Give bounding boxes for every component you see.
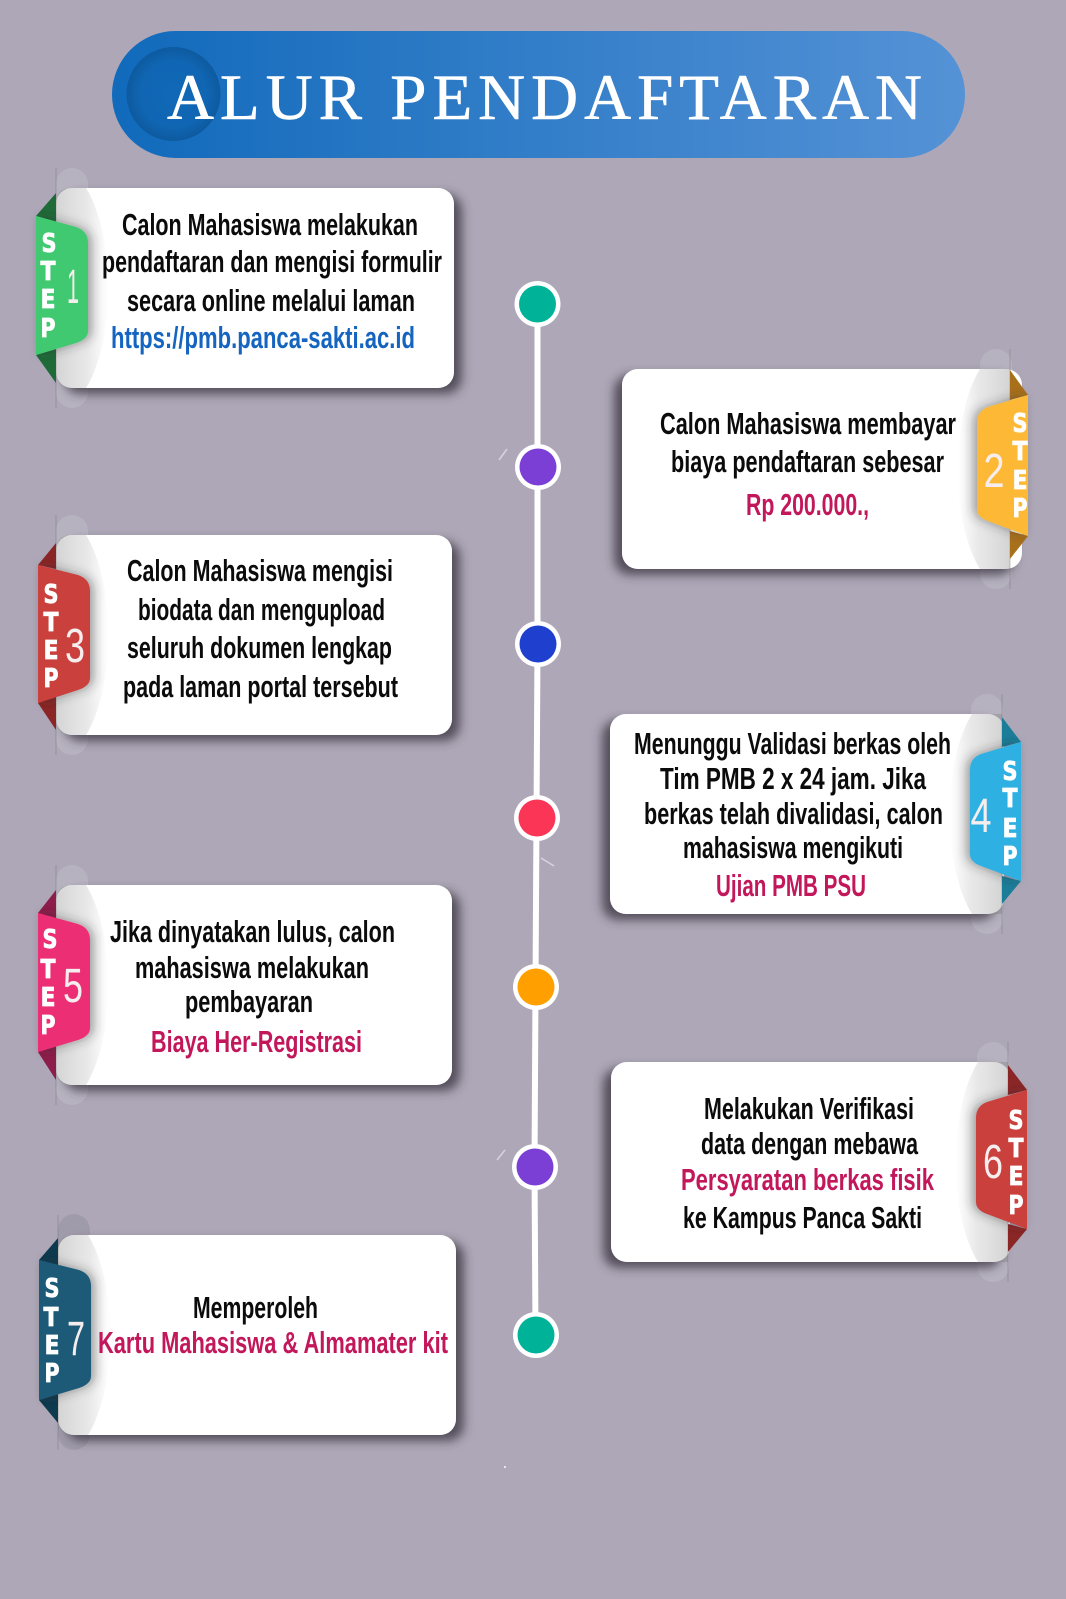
text: step 1: secara online melalui laman (127, 283, 415, 318)
ribbon label: step 7: S (44, 1274, 60, 1304)
ribbon label: step 2: P (1012, 494, 1028, 524)
ribbon label: step 2: S (1012, 409, 1028, 439)
ribbon label: step 1: S (42, 229, 56, 259)
timeline with seven nodes (497, 281, 561, 1468)
text: step 2: Rp 200.000., (746, 487, 869, 522)
ribbon label: step 6 (983, 1106, 1024, 1221)
ribbon label: step 2: T (1012, 437, 1028, 467)
text: step 1: Calon Mahasiswa melakukan (122, 207, 418, 242)
text: step 3: pada laman portal tersebut (123, 669, 398, 704)
ribbon label: step 7: P (44, 1359, 60, 1389)
ribbon label: step 3 (44, 580, 85, 694)
ribbon label: step 1: E (40, 285, 56, 315)
panel: step 2 (622, 349, 1028, 589)
text: step 7: Memperoleh (193, 1290, 318, 1325)
ribbon label: step 6: T (1008, 1134, 1024, 1164)
text: step 5: pembayaran (185, 984, 313, 1019)
ribbon label: step 3: 3 (65, 620, 85, 673)
panel: step 6 (611, 1042, 1027, 1282)
ribbon label: step 7: 7 (67, 1313, 85, 1366)
text: step 6: Persyaratan berkas fisik (681, 1162, 935, 1197)
panel: step 3 (38, 515, 452, 755)
panel: step 1 (36, 168, 454, 408)
ribbon label: step 4 (970, 757, 1018, 872)
ribbon label: step 7: E (44, 1331, 60, 1361)
ribbon: step 2 (958, 349, 1028, 589)
text: step 3 (123, 553, 398, 704)
ribbon label: step 7: T (44, 1303, 59, 1333)
ribbon label: step 1 (40, 229, 79, 344)
text: step 6: Melakukan Verifikasi (704, 1091, 914, 1126)
ribbon: step 6 (956, 1042, 1027, 1282)
text: step 4: berkas telah divalidasi, calon (644, 796, 943, 831)
ribbon label: step 3: P (44, 664, 58, 694)
panel: step 4 (610, 694, 1021, 934)
panel: step 1: 1 (67, 261, 79, 314)
title text: ALUR PENDAFTARAN (167, 62, 922, 134)
ribbon label: step 5: P (40, 1011, 56, 1041)
ribbon: step 1 (36, 168, 108, 408)
ribbon label: step 7 (44, 1274, 85, 1389)
ribbon label: step 3: E (44, 636, 58, 666)
text: step 1: pendaftaran dan mengisi formulir (102, 244, 442, 279)
text: step 4: Ujian PMB PSU (716, 868, 866, 903)
text: step 6: data dengan mebawa (701, 1126, 919, 1161)
ribbon label: step 3: S (44, 580, 58, 610)
ribbon label: step 2 (984, 409, 1028, 524)
text: step 1 (102, 207, 442, 355)
panel: step 5 (38, 865, 452, 1105)
ribbon: step 3 (38, 515, 108, 755)
ribbon label: step 4: 4 (970, 790, 992, 843)
ribbon label: step 6: P (1008, 1191, 1024, 1221)
text: step 6 (681, 1091, 935, 1235)
text: step 7 (98, 1290, 448, 1360)
ribbon label: step 3: T (44, 608, 59, 638)
text: step 5: Jika dinyatakan lulus, calon (110, 914, 395, 949)
ribbon label: step 4: P (1002, 842, 1018, 872)
text: step 3: Calon Mahasiswa mengisi (127, 553, 393, 588)
ribbon: step 4 (950, 694, 1021, 934)
ribbon label: step 1: T (40, 257, 56, 287)
text: step 6: ke Kampus Panca Sakti (683, 1200, 922, 1235)
ribbon label: step 2: E (1012, 466, 1028, 496)
text: step 5: Biaya Her-Registrasi (151, 1024, 362, 1059)
panel: step 7 (39, 1214, 456, 1450)
ribbon label: step 5 (40, 925, 83, 1041)
ribbon label: step 5: 5 (63, 960, 83, 1013)
text: step 3: biodata dan mengupload (138, 592, 385, 627)
ribbon: step 7 (39, 1215, 110, 1450)
ribbon label: step 5: E (40, 983, 56, 1013)
text: step 4: mahasiswa mengikuti (683, 830, 903, 865)
text: step 4 (634, 726, 951, 903)
ribbon label: step 4: T (1002, 784, 1018, 814)
ribbon label: step 5: S (42, 925, 58, 955)
text: step 5: mahasiswa melakukan (135, 950, 369, 985)
ribbon label: step 4: S (1002, 757, 1018, 787)
ribbon label: step 2: 2 (984, 445, 1004, 498)
ribbon label: step 1: P (40, 314, 56, 344)
title banner (112, 31, 965, 158)
ribbon label: step 5: T (40, 955, 56, 985)
text: step 5 (110, 914, 395, 1059)
ribbon: step 5 (38, 865, 108, 1105)
text: step 1: https://pmb.panca-sakti.ac.id (111, 320, 415, 355)
text: step 4: Tim PMB 2 x 24 jam. Jika (660, 761, 927, 796)
text: step 2: biaya pendaftaran sebesar (671, 444, 944, 479)
text: step 7: Kartu Mahasiswa & Almamater kit (98, 1325, 448, 1360)
text: step 3: seluruh dokumen lengkap (127, 630, 392, 665)
ribbon label: step 4: E (1002, 814, 1018, 844)
ribbon label: step 6: E (1008, 1162, 1024, 1192)
ribbon label: step 6: S (1008, 1106, 1024, 1136)
ribbon label: step 6: 6 (983, 1136, 1003, 1189)
text: step 2 (660, 406, 956, 522)
